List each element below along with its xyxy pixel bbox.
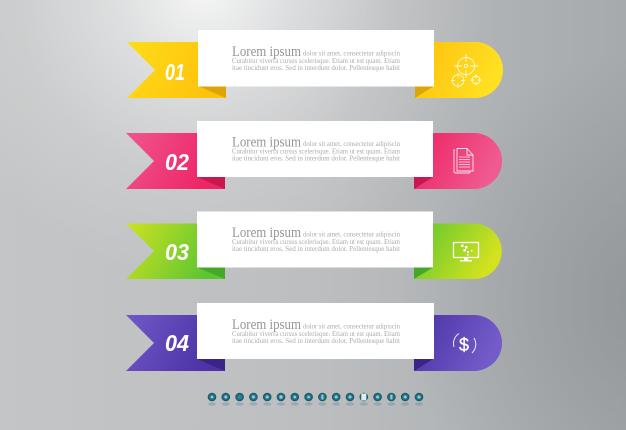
left fold 03: [197, 268, 225, 279]
text block 02: Curabitur viverra cursus scelerisque. Etiam ut est quam. Etiam: [232, 148, 401, 156]
number 03: 03: [165, 239, 189, 265]
icon: dollar: $: [459, 335, 469, 355]
text block 03: itae tincidunt eros. Sed in interdum dolor. Pellentesque habit: [232, 245, 400, 253]
panel: step 04: [126, 303, 502, 371]
text block 04: Lorem ipsum: [232, 317, 302, 333]
number 01: 01: [165, 59, 185, 85]
text block 01: itae tincidunt eros. Sed in interdum dolor. Pellentesque habit: [232, 64, 400, 72]
left fold 02: [197, 177, 225, 189]
white card 04: [197, 303, 434, 359]
right tab 03: [414, 224, 502, 279]
text block 03: dolor sit amet, consectetur adipiscin: [303, 230, 400, 238]
left fold 04: [197, 359, 225, 371]
text block 02: dolor sit amet, consectetur adipiscin: [303, 140, 400, 148]
right fold 03: [414, 268, 433, 279]
text block 04: [232, 317, 401, 345]
panel: step 01: [127, 30, 503, 98]
right tab 04: [414, 315, 502, 371]
icon: documents: [454, 148, 473, 173]
text block 04: Curabitur viverra cursus scelerisque. Etiam ut est quam. Etiam: [232, 330, 401, 338]
left ribbon 04: [126, 315, 225, 371]
text block 03: Lorem ipsum: [232, 225, 302, 241]
left ribbon 03: [126, 224, 225, 279]
text block 01: [232, 44, 401, 72]
icon: targets: [451, 54, 482, 88]
text block 03: [232, 225, 401, 253]
icon: dollar: [454, 334, 476, 355]
text block 04: dolor sit amet, consectetur adipiscin: [303, 322, 400, 330]
white card 03: [197, 212, 433, 268]
text block 04: itae tincidunt eros. Sed in interdum dolor. Pellentesque habit: [232, 337, 400, 345]
text block 02: Lorem ipsum: [232, 134, 302, 150]
white card 01: [198, 30, 434, 86]
left ribbon 01: [127, 42, 226, 98]
right tab 02: [414, 133, 502, 189]
text block 01: Curabitur viverra cursus scelerisque. Etiam ut est quam. Etiam: [232, 57, 401, 65]
left fold 01: [198, 86, 226, 98]
icon: monitor: [454, 242, 478, 262]
right tab 01: [415, 42, 503, 98]
text block 01: Lorem ipsum: [232, 44, 302, 60]
panel: step 03: [126, 212, 502, 279]
white card 02: [197, 121, 433, 177]
number 02: 02: [165, 149, 189, 175]
right fold 02: [414, 177, 433, 189]
left ribbon 02: [126, 133, 225, 189]
right fold 04: [414, 359, 433, 371]
text block 01: dolor sit amet, consectetur adipiscin: [303, 50, 400, 58]
text block 02: itae tincidunt eros. Sed in interdum dolor. Pellentesque habit: [232, 154, 400, 162]
text block 02: [232, 134, 401, 162]
panel: step 02: [126, 121, 502, 189]
text block 03: Curabitur viverra cursus scelerisque. Etiam ut est quam. Etiam: [232, 238, 401, 246]
right fold 01: [415, 86, 434, 98]
number 04: 04: [165, 330, 189, 356]
icon row: [208, 393, 423, 406]
